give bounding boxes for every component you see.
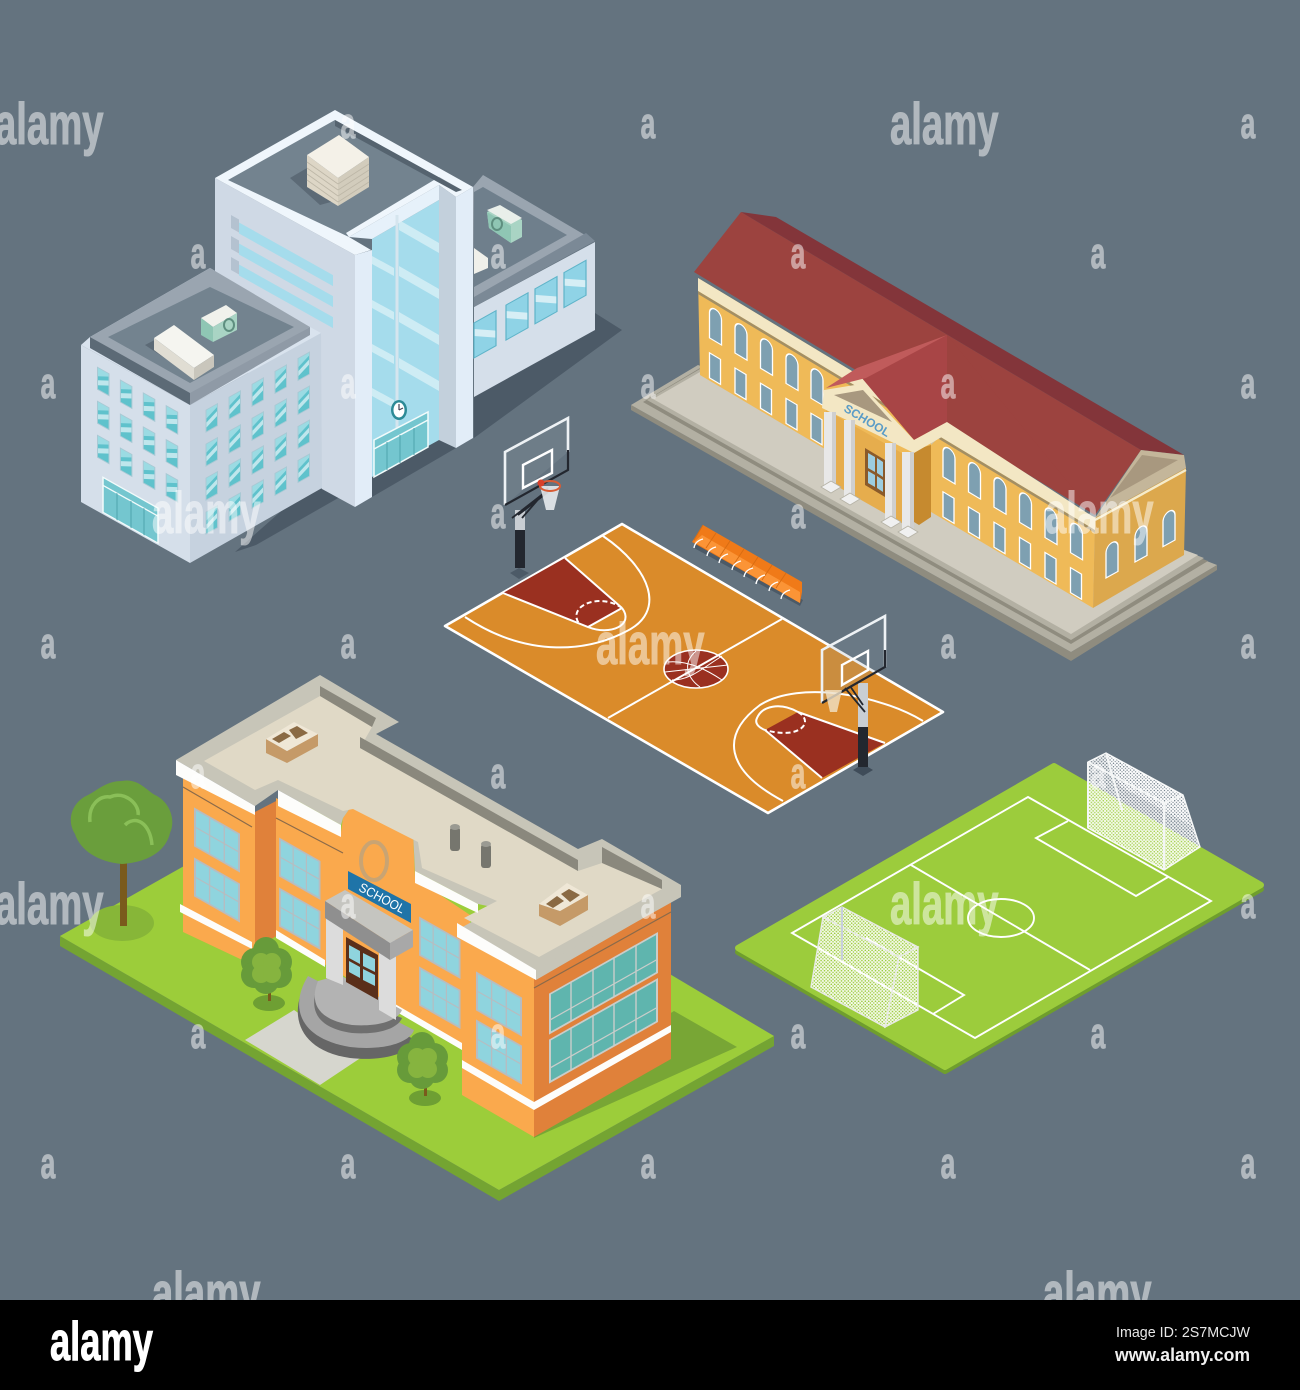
side gable [1095,450,1186,520]
centre front wall [276,798,470,1052]
pitch lines [792,797,1211,1038]
windows left face [98,367,178,554]
building: modern glass office [81,110,622,563]
windows right face [206,352,310,534]
website: www.alamy.com [1114,1345,1250,1365]
watermarks: large alamy: alamy [596,613,705,677]
paint: far key [503,558,622,627]
small tree: left [241,937,292,1011]
chimney: right [539,883,588,926]
right pier [439,185,456,448]
watermarks: small a: a [341,358,356,408]
watermarks: small a: a [1091,1008,1106,1058]
watermarks: small a [41,98,1256,1188]
round window [361,842,387,880]
watermarks: large alamy: alamy [152,1262,261,1326]
portico roof [861,335,947,440]
watermarks: small a: a [941,1138,956,1188]
watermarks: small a: a [41,358,56,408]
watermarks: large alamy: alamy [890,93,999,157]
roof box [145,325,214,380]
hoop: far basket [505,418,568,579]
left pier [355,250,372,507]
school sign: SCHOOL [841,401,893,440]
right wing front [462,930,534,1137]
entrance door [374,412,428,477]
watermarks: small a: a [641,878,656,928]
watermarks: small a: a [791,488,806,538]
ground shadows [235,313,622,552]
watermarks: large alamy: alamy [890,873,999,937]
watermarks: small a: a [641,358,656,408]
spectator bench [692,525,803,606]
grass lot [60,778,774,1201]
watermarks: small a: a [1241,878,1256,928]
left wing front wall [183,770,255,966]
front walkway [245,1010,362,1085]
watermarks: small a: a [341,1138,356,1188]
window strips [231,215,333,328]
door [865,448,885,497]
main roof [694,212,1184,515]
columns [821,412,918,538]
front windows [195,809,521,1083]
building: classical school with red roof [631,212,1217,661]
watermarks: small a: a [1241,98,1256,148]
end wall windows [1106,508,1175,578]
watermarks: large alamy: alamy [1043,1262,1152,1326]
entrance door [346,937,378,1000]
right side long windows [550,934,657,1082]
watermarks: small a: a [1241,358,1256,408]
pediment [822,384,914,453]
watermarks: small a: a [641,1138,656,1188]
watermarks: small a: a [1091,228,1106,278]
watermarks: small a: a [791,228,806,278]
watermarks: small a: a [41,618,56,668]
cornice [698,278,1095,530]
building: brick school [60,675,774,1201]
watermarks: small a: a [341,878,356,928]
entrance canopy [325,890,413,960]
left wing side wall [255,800,278,949]
entrance columns [326,908,396,1020]
glass atrium [349,185,439,477]
image id: Image ID: 2S7MCJW [1116,1324,1251,1341]
watermarks: small a: a [791,1008,806,1058]
watermarks: small a: a [491,488,506,538]
field slab [738,770,1261,1071]
white eaves [176,760,536,980]
watermarks: small a: a [341,98,356,148]
arched and rectangular windows [710,306,1082,600]
eave of right wing [914,422,1095,530]
big tree [71,781,172,941]
chimney: left [266,722,318,763]
roof [176,675,681,980]
school sign [348,871,411,923]
icon: clock [391,400,407,420]
portico [821,335,1095,538]
watermarks: small a: a [491,1008,506,1058]
school sign: SCHOOL [357,880,408,916]
watermarks: large alamy [0,93,1154,1326]
watermarks: large alamy: alamy [152,482,261,546]
footer logo: alamy [50,1310,153,1372]
goal: near [811,907,918,1027]
watermarks: small a: a [941,618,956,668]
air conditioner [201,305,237,342]
entrance steps [298,975,415,1059]
soccer field [738,753,1261,1071]
footer bar [0,1300,1300,1390]
stepped base [631,365,1217,661]
watermarks: small a: a [1091,748,1106,798]
watermarks: large alamy: alamy [1045,482,1154,546]
basketball court [445,524,943,813]
centre circle [664,650,728,688]
roof vents [450,824,491,868]
watermarks: small a: a [341,618,356,668]
front left block [81,268,322,563]
watermarks: small a: a [191,1008,206,1058]
watermarks: small a: a [1241,618,1256,668]
rooftop cooling unit [290,135,369,206]
court markings [465,536,923,801]
tall central block [215,110,473,507]
rear wing [473,175,595,397]
watermarks: small a: a [491,228,506,278]
watermarks: small a: a [791,748,806,798]
small tree: right [397,1032,448,1106]
goal: far [1088,753,1200,870]
right wing side [534,900,671,1137]
main walls [698,278,1095,608]
paint: near key [765,712,885,778]
watermarks: small a: a [41,1138,56,1188]
ledges [180,904,671,1110]
court floor [445,524,943,813]
watermarks: small a: a [491,748,506,798]
watermarks: small a: a [191,228,206,278]
watermarks: small a: a [941,358,956,408]
watermarks: small a: a [191,748,206,798]
watermarks: small a: a [641,98,656,148]
hoop: near basket [822,616,885,776]
watermarks: small a: a [1241,1138,1256,1188]
